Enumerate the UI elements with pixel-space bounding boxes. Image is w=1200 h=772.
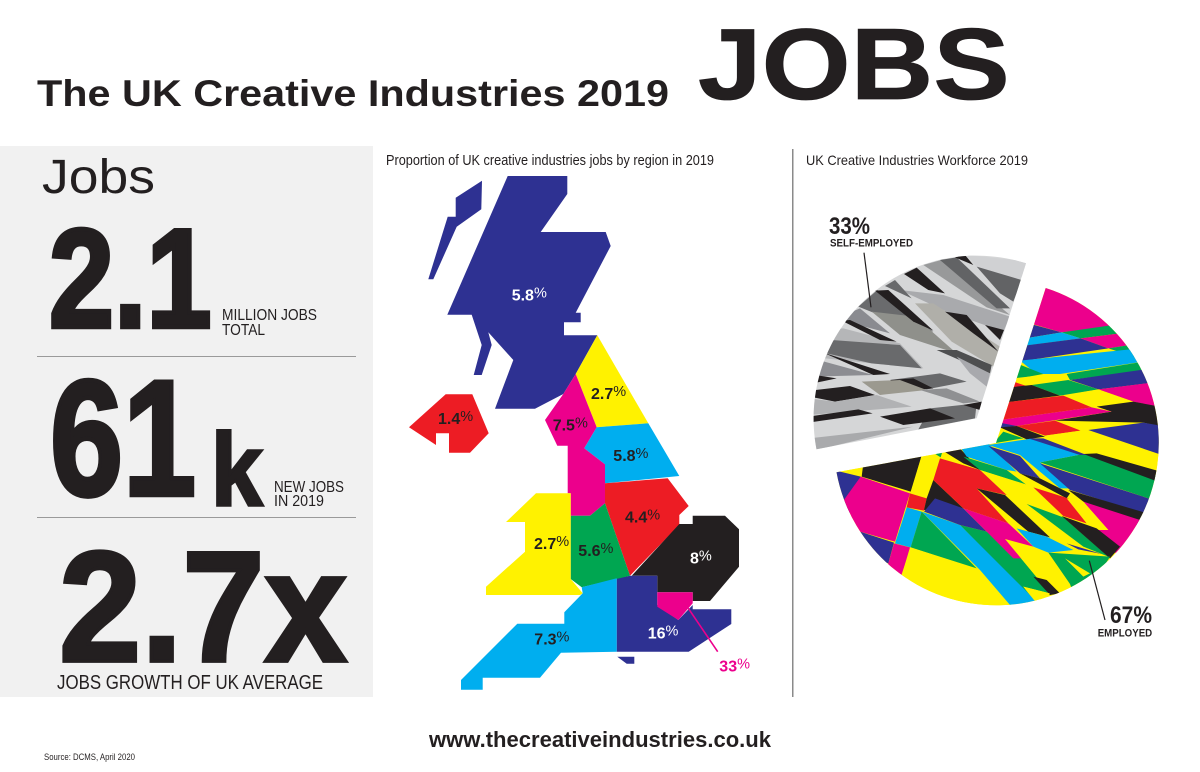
stat label: million jobs total <box>222 307 317 339</box>
value labels: 5.8 <box>613 448 636 465</box>
callout line: London <box>688 608 718 652</box>
value labels: 7.3 <box>534 631 557 648</box>
callout: 67% employed <box>1089 561 1152 640</box>
title: The UK Creative Industries 2019 <box>37 73 669 114</box>
lower stripes <box>836 438 1156 606</box>
stat: 61k: 61 <box>50 346 196 530</box>
region: South East <box>617 576 731 652</box>
source note: Source: DCMS, April 2020 <box>44 752 135 763</box>
callout: 67% employed: EMPLOYED <box>1098 628 1152 640</box>
pie slice: self-employed 33% <box>814 256 1026 450</box>
map heading: Proportion of UK creative industries jobs by region in 2019 <box>386 153 714 169</box>
stat label: new jobs in 2019 <box>274 479 344 510</box>
stat label: million jobs total: MILLION JOBS <box>222 307 317 324</box>
callout: 33% self-employed: 33% <box>829 213 870 240</box>
value labels: % <box>636 446 649 462</box>
value labels: % <box>557 629 570 645</box>
value labels: % <box>556 534 569 550</box>
value labels: % <box>460 409 473 425</box>
value labels: 1.4 <box>438 411 460 428</box>
heading: JOBS: JOBS <box>698 7 1010 121</box>
region: East of England <box>632 516 739 601</box>
value labels: 5.6 <box>578 543 601 560</box>
region: Scottish islands <box>428 181 482 279</box>
value labels: 7.5 <box>553 418 575 435</box>
stat: 2.1: 2.1 <box>49 201 212 357</box>
region: West Midlands <box>571 503 630 587</box>
value labels: % <box>665 623 678 639</box>
stat: 61k <box>50 346 263 530</box>
callout: 33% self-employed <box>829 213 913 307</box>
region: North West <box>545 374 605 516</box>
region: Yorkshire <box>584 423 679 483</box>
value labels: 2.7 <box>534 536 556 553</box>
region: London <box>657 592 693 620</box>
region: Northern Ireland <box>409 394 489 453</box>
region: South West <box>461 578 617 690</box>
stat label: new jobs in 2019: NEW JOBS <box>274 479 344 496</box>
value labels: % <box>575 416 588 432</box>
callout: 33% self-employed: SELF-EMPLOYED <box>830 238 913 250</box>
panel heading: Jobs: Jobs <box>42 151 155 204</box>
stat: 2.7x: 2.7x <box>59 520 347 695</box>
value labels: 8 <box>690 550 699 567</box>
stat: 61k: k <box>211 411 263 527</box>
value labels: 4.4 <box>625 510 647 527</box>
value labels: 33 <box>719 659 737 676</box>
value labels: 16 <box>648 625 666 642</box>
callout: 67% employed: 67% <box>1110 602 1152 629</box>
value labels <box>438 286 750 676</box>
region: Wales <box>486 493 583 595</box>
value labels: % <box>737 657 750 673</box>
value labels: 5.8 <box>512 288 534 305</box>
value labels: % <box>601 541 614 557</box>
value labels: 2.7 <box>591 386 613 403</box>
website url: www.thecreativeindustries.co.uk <box>428 727 771 752</box>
region: Scotland <box>447 176 611 409</box>
upper stripes <box>994 288 1159 477</box>
region: North East <box>576 335 648 427</box>
map: UK regions <box>409 176 750 690</box>
stat label: new jobs in 2019: IN 2019 <box>274 493 324 510</box>
panel: jobs statistics <box>0 146 373 697</box>
value labels: % <box>699 548 712 564</box>
pie slice: employed 67% <box>836 288 1159 606</box>
value labels: % <box>647 508 660 524</box>
stat label: jobs growth: JOBS GROWTH OF UK AVERAGE <box>57 672 323 694</box>
value labels: % <box>613 384 626 400</box>
pie heading: UK Creative Industries Workforce 2019 <box>806 152 1028 168</box>
region: East Midlands <box>605 478 689 576</box>
value labels: % <box>534 286 547 302</box>
stat label: million jobs total: TOTAL <box>222 322 265 339</box>
region: Isle of Wight <box>617 657 634 664</box>
